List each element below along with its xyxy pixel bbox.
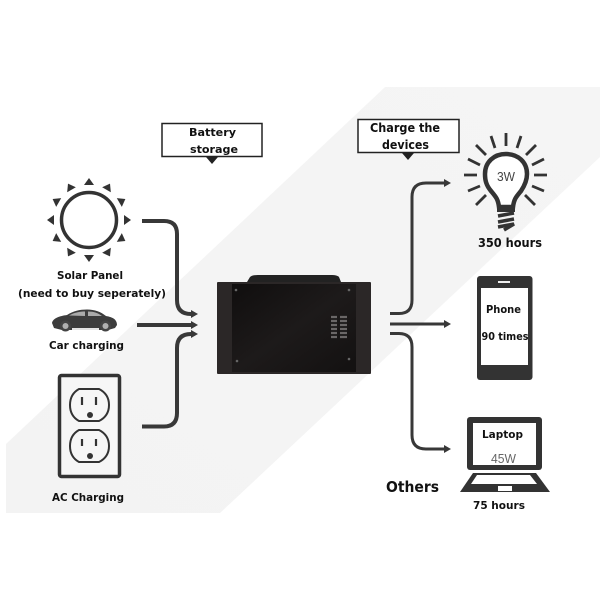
icon: light bulb	[464, 133, 547, 230]
arrow: battery to phone	[390, 320, 451, 328]
arrow: car to battery	[137, 321, 198, 329]
callout: battery storage: storage	[190, 143, 238, 156]
label: others: Others	[386, 478, 439, 496]
arrow: battery to bulb	[390, 179, 451, 314]
icon: phone	[477, 276, 532, 380]
callout: charge the devices: Charge the	[370, 121, 440, 135]
callout: battery storage	[162, 124, 262, 164]
icon: sun	[47, 178, 131, 262]
label: solar panel: (need to buy seperately)	[18, 288, 166, 300]
label: 75 hours: 75 hours	[473, 499, 525, 512]
callout: charge the devices: devices	[382, 138, 429, 152]
arrow: battery to laptop	[390, 334, 451, 453]
icon: car	[52, 310, 117, 332]
label: solar panel: Solar Panel	[57, 270, 123, 282]
label: solar panel	[18, 270, 166, 300]
icon: light bulb: 3W	[497, 169, 516, 184]
icon: laptop: Laptop	[482, 428, 523, 441]
battery device	[217, 275, 371, 374]
callout: charge the devices	[358, 120, 459, 160]
label: 350 hours: 350 hours	[478, 236, 542, 250]
label: car charging: Car charging	[49, 340, 124, 352]
label: AC charging: AC Charging	[52, 492, 124, 504]
icon: AC outlet	[60, 376, 120, 476]
arrow: AC to battery	[142, 330, 198, 426]
background diagonal band	[6, 87, 600, 513]
icon: laptop: 45W	[491, 451, 517, 466]
arrow: solar to battery	[142, 221, 198, 318]
icon: phone: Phone	[486, 304, 521, 316]
icon: laptop	[460, 417, 550, 492]
icon: phone: 90 times	[482, 331, 528, 343]
callout: battery storage: Battery	[189, 126, 236, 139]
